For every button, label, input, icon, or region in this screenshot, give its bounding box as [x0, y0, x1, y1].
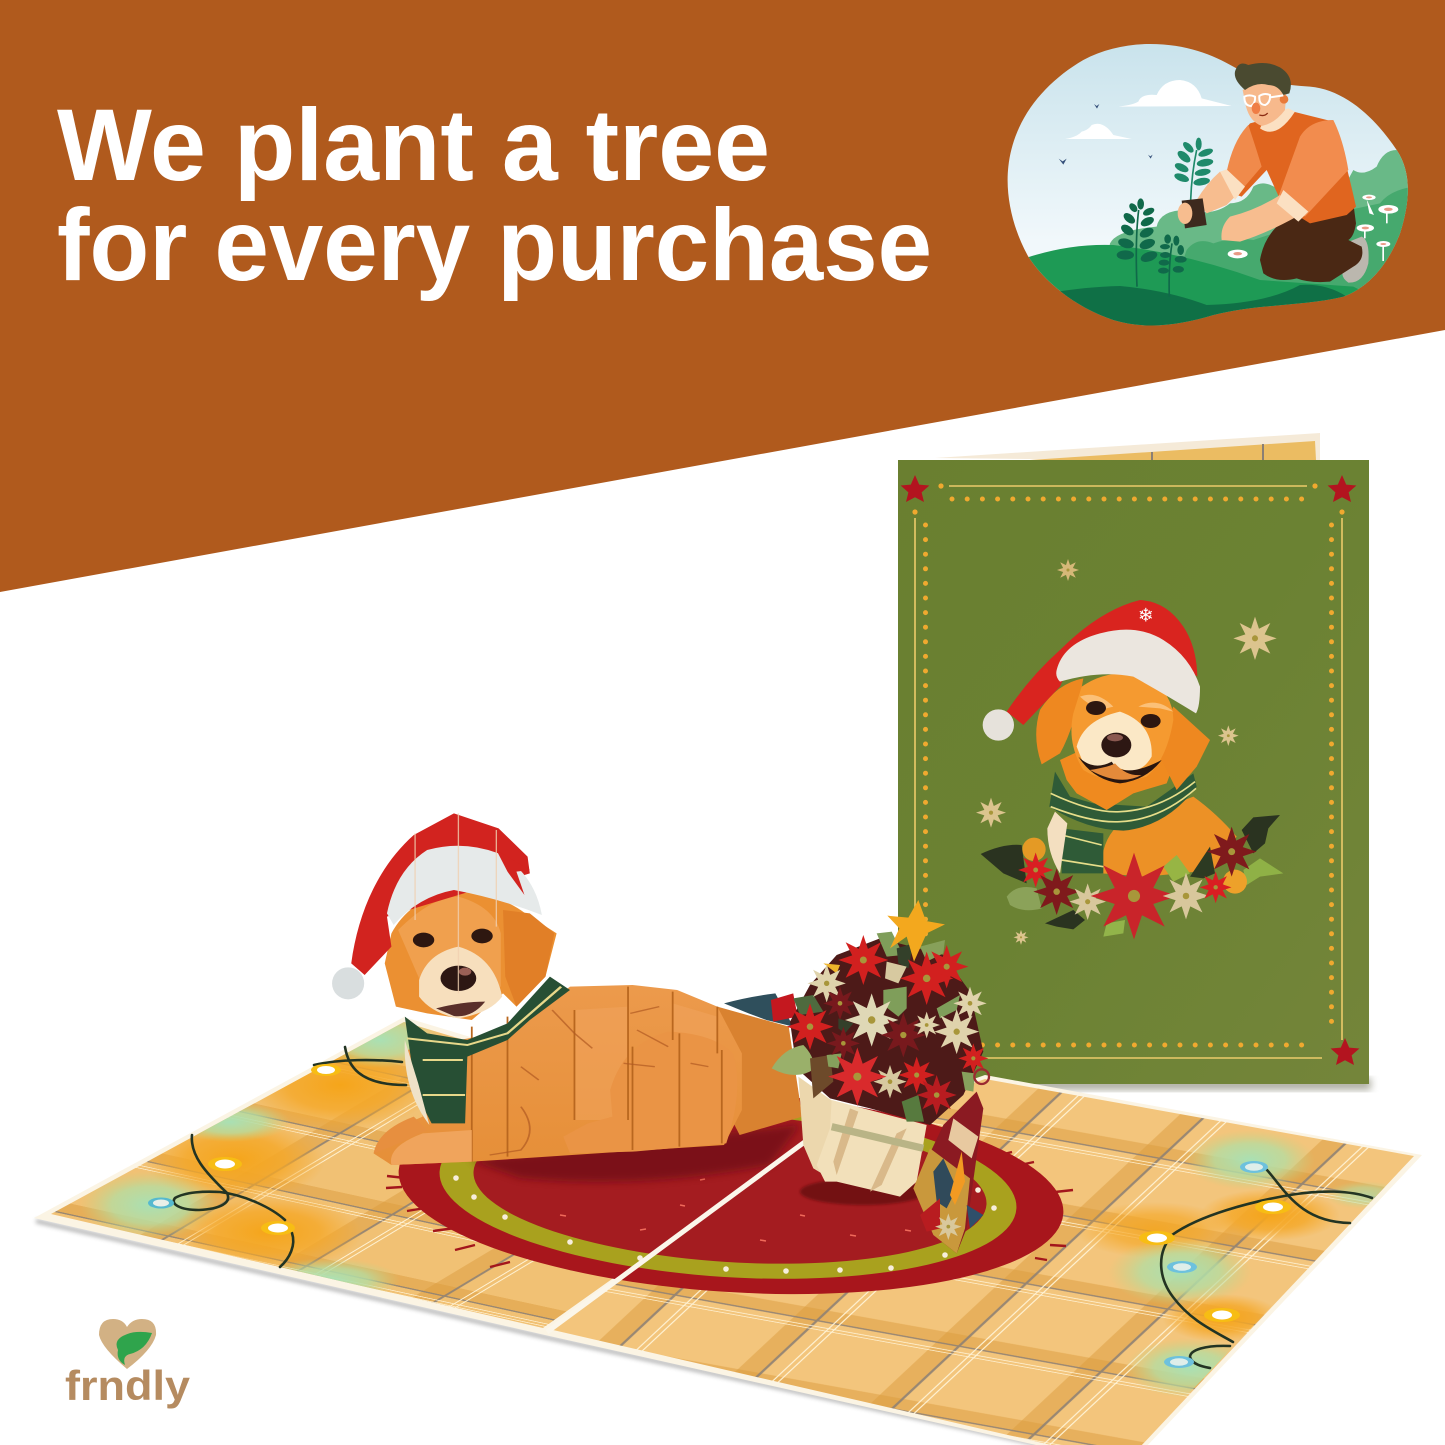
ring dots: [453, 1175, 997, 1274]
floor card shadow: [36, 1221, 1060, 1445]
face: [1071, 673, 1173, 780]
gold flowers: [976, 617, 1277, 945]
inner red: [469, 1098, 991, 1278]
pop-up floor card: [34, 1012, 1422, 1445]
scarf: [405, 977, 570, 1123]
green greeting card: [898, 460, 1369, 1084]
tail: [717, 1007, 802, 1135]
gold lines and dots border: [912, 483, 1345, 1058]
illustration: man planting a tree: [1008, 44, 1413, 333]
eyes: [413, 933, 434, 947]
corner stars: [901, 475, 1359, 1065]
body: [374, 985, 742, 1165]
back page of greeting card: [935, 433, 1320, 462]
brown banner background: [0, 0, 1445, 592]
title: [57, 88, 932, 302]
card dog illustration: ❄: [1138, 606, 1153, 627]
hat pompom: [332, 967, 364, 999]
logo: frndly: [65, 1319, 191, 1409]
nose: [441, 966, 476, 991]
leaves: [772, 932, 975, 1122]
sky blob: [1008, 44, 1408, 325]
plaid left panel: [51, 1022, 805, 1328]
holly leaves behind wreath: [981, 815, 1283, 929]
face panel: [398, 897, 501, 987]
card dog illustration: [976, 600, 1283, 945]
nose: [1101, 733, 1131, 757]
scarf: [1047, 772, 1197, 873]
title: for every purchase: [57, 188, 932, 302]
clouds and birds: [1059, 80, 1232, 165]
flowers: [1228, 195, 1398, 261]
pot: [798, 1077, 833, 1178]
hat fur band: [387, 846, 542, 925]
wreath poinsettias: [1018, 827, 1257, 939]
red rug: [386, 1071, 1073, 1313]
small saplings: [1117, 198, 1187, 297]
pop-up dog: [332, 813, 802, 1165]
man figure: [1178, 63, 1369, 283]
eyes: [1086, 701, 1106, 715]
string lights glow: [80, 1012, 1405, 1398]
fireplace panel: [913, 1069, 989, 1253]
tree foliage backing: [790, 938, 983, 1125]
pot shadow: [800, 1178, 927, 1205]
title: We plant a tree: [57, 88, 770, 202]
card shadow: [905, 1078, 1371, 1090]
plaid right panel: [553, 1079, 1414, 1445]
front paws: [374, 1117, 427, 1153]
pop-up slits: [472, 987, 722, 1162]
christmas tree pot and fireplace: [772, 900, 989, 1253]
seedling held by man: [1173, 138, 1214, 200]
fringe: [386, 1152, 1073, 1267]
neck fur: [1060, 737, 1177, 810]
heart: [99, 1319, 156, 1369]
body: [1102, 797, 1237, 877]
wires: [174, 1047, 1372, 1368]
rug shadow under dog: [470, 1125, 800, 1182]
fur marks: [490, 1007, 708, 1155]
dog head: [385, 888, 557, 1020]
olive ring: [434, 1085, 1022, 1295]
santa hat: [1007, 600, 1197, 725]
right ear: [503, 910, 554, 1007]
wordmark: frndly: [65, 1362, 191, 1409]
tree star: [887, 900, 945, 962]
paper edge: [34, 1017, 1422, 1445]
landscape: [1028, 150, 1408, 326]
rug flecks: [560, 1179, 911, 1241]
muzzle: [419, 947, 502, 1018]
tail ribbon: [724, 993, 793, 1027]
bulbs: [148, 1064, 1291, 1368]
centre fold: [547, 1141, 806, 1332]
leaf: [117, 1332, 152, 1365]
ears: [1036, 678, 1083, 764]
muzzle: [1077, 712, 1152, 771]
santa hat: [351, 813, 530, 975]
haunch: [563, 1032, 737, 1153]
poinsettia flowers: [787, 935, 988, 1115]
body panels shading: [574, 1003, 717, 1120]
top small gold flower: [1057, 559, 1079, 581]
